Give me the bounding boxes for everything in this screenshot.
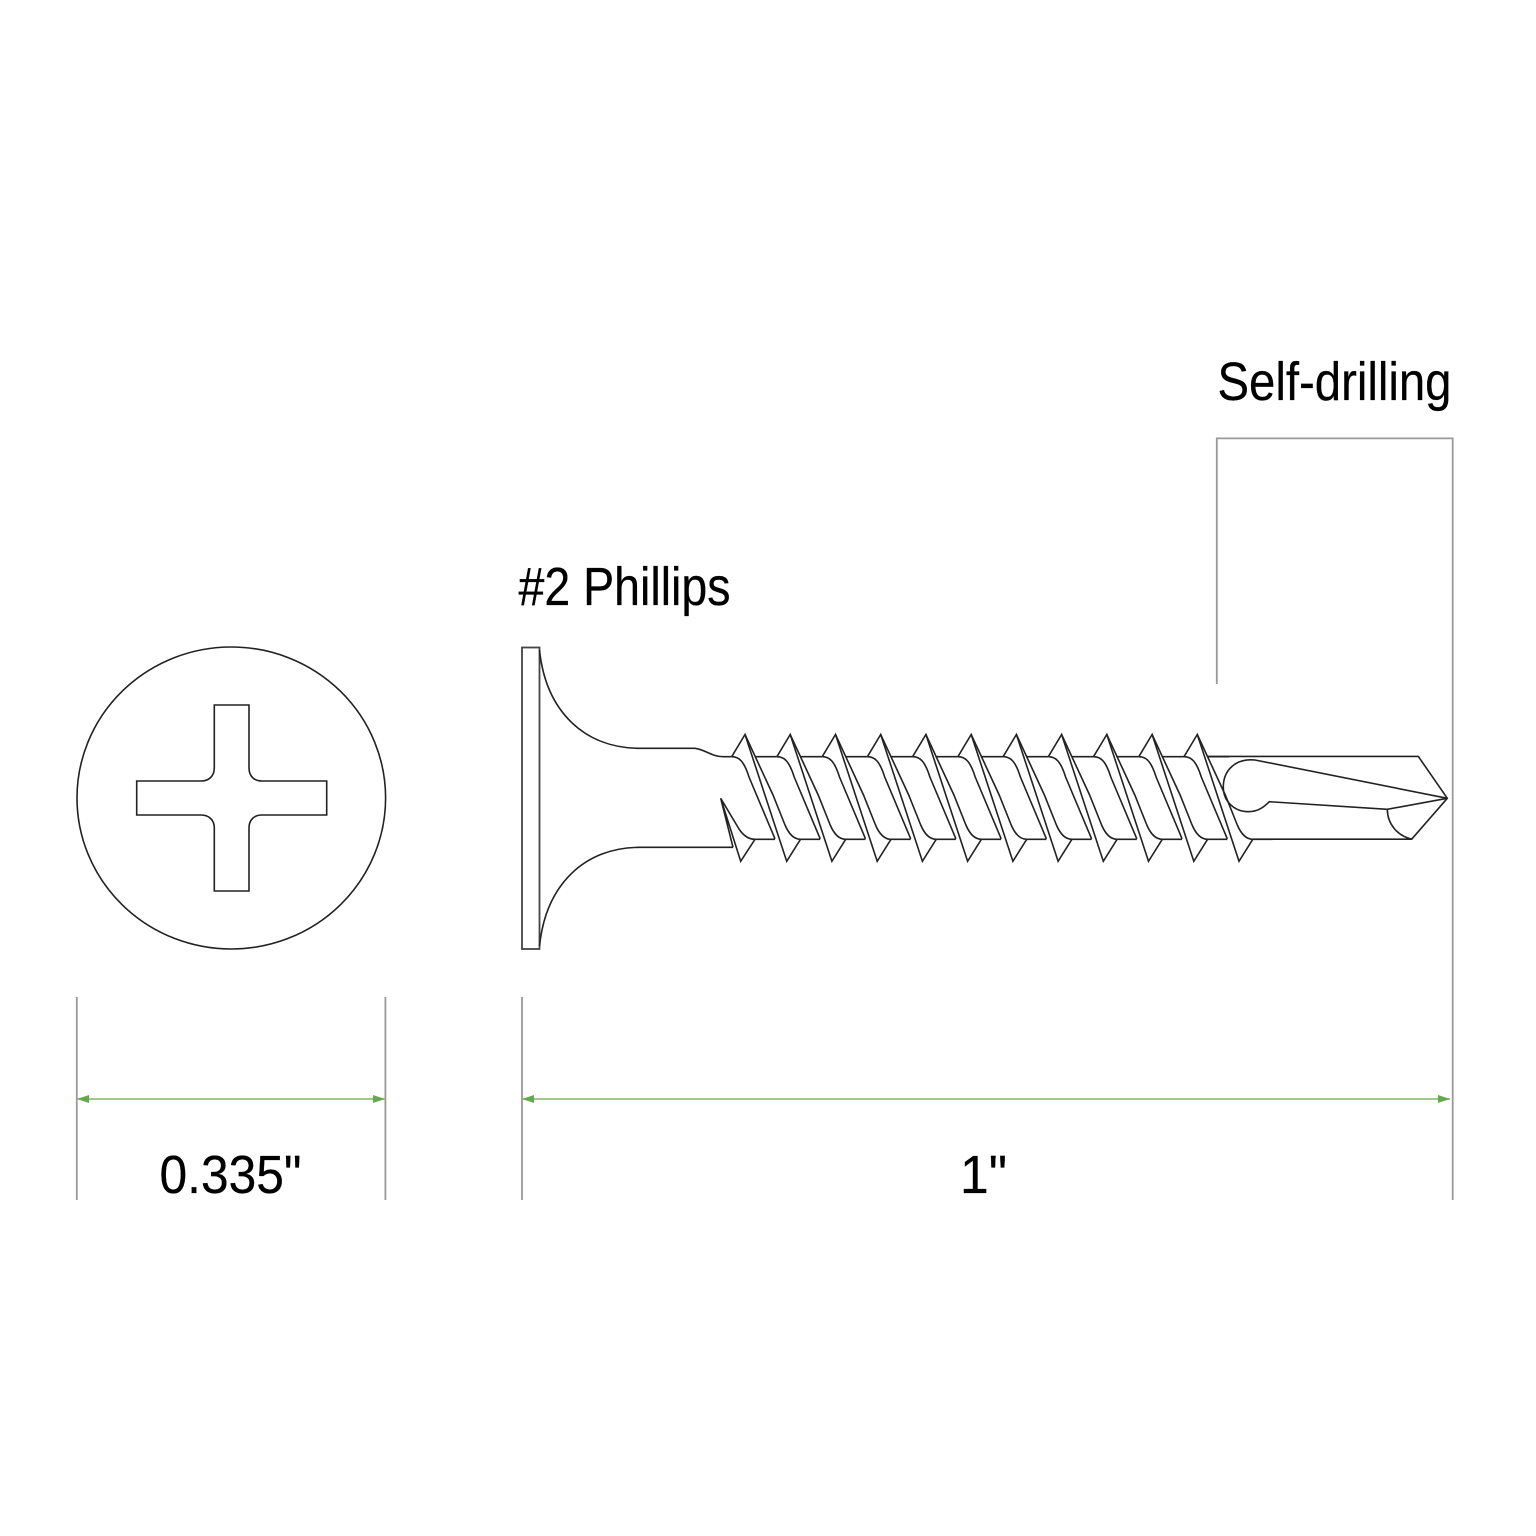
dimension extension lines xyxy=(77,438,1453,1200)
starting thread fin xyxy=(721,798,775,861)
flange head xyxy=(522,648,540,949)
lower neck and shank xyxy=(540,847,733,946)
drill flute xyxy=(1223,760,1447,839)
label: self-drilling: Self-drilling xyxy=(1218,352,1452,412)
threads xyxy=(732,734,1272,861)
phillips cross recess xyxy=(137,705,327,891)
self-drilling bracket xyxy=(1217,438,1453,1200)
drill point outline xyxy=(1207,756,1447,839)
dimension arrow: length xyxy=(522,1095,1450,1103)
screw head top view xyxy=(77,647,386,949)
label: diameter value: 0.335" xyxy=(160,1145,302,1205)
upper neck and shank xyxy=(540,650,732,757)
label: phillips drive: #2 Phillips xyxy=(518,557,730,617)
dimension arrow: head diameter xyxy=(77,1095,385,1103)
label: length value: 1" xyxy=(960,1145,1007,1205)
screw side view xyxy=(522,648,1447,949)
head circle xyxy=(77,647,386,949)
